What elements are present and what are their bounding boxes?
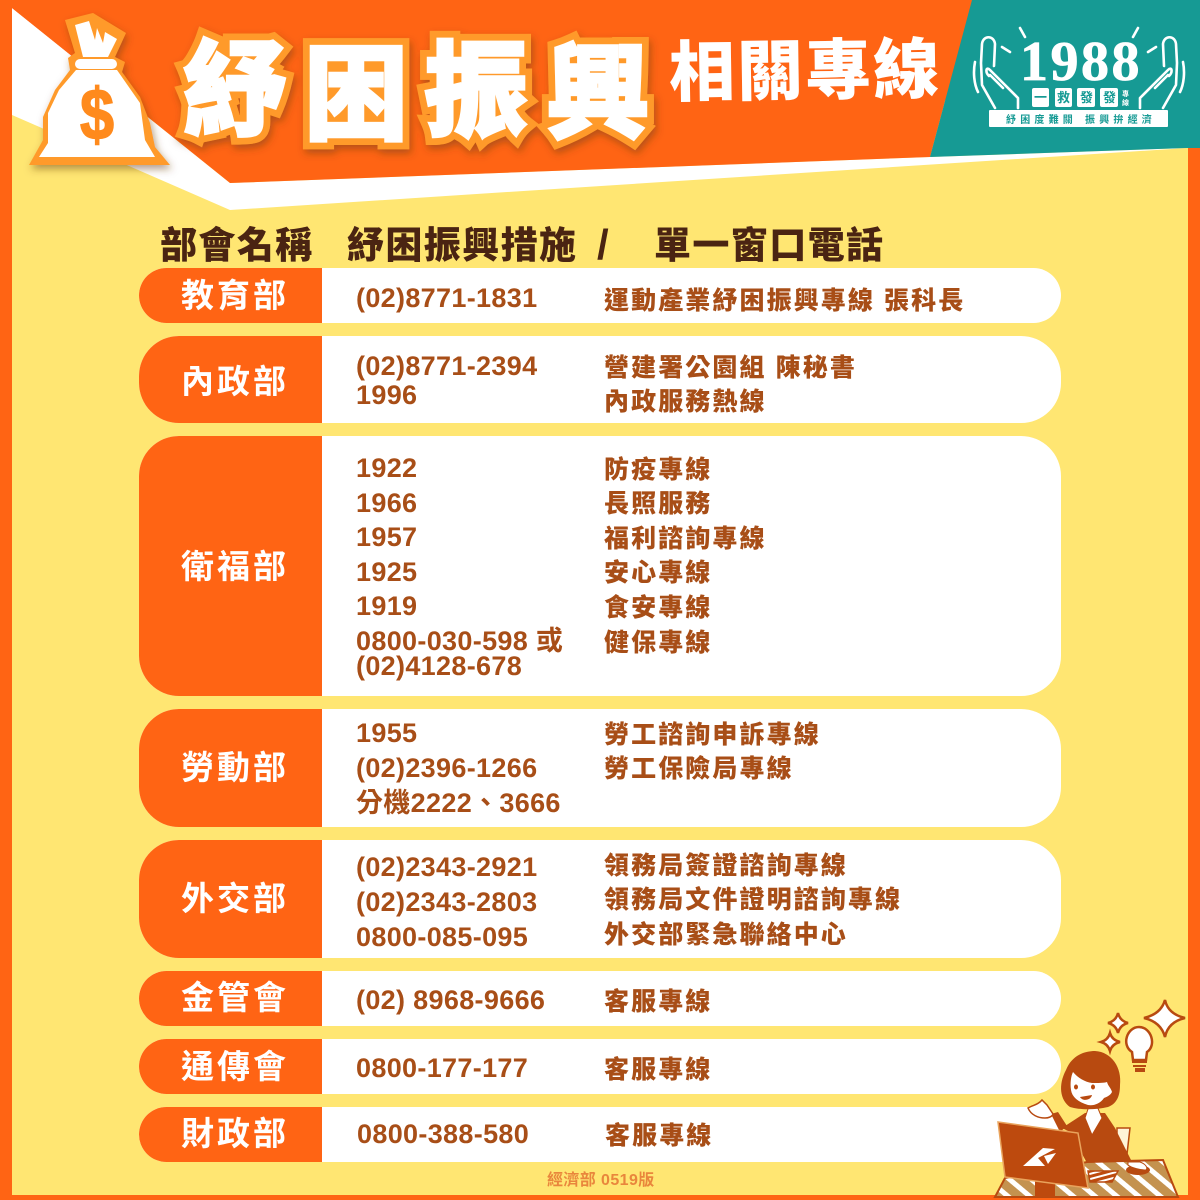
row: 外交部: 領務局簽證諮詢專線 [604, 851, 848, 880]
logo tiles: 發 [1080, 90, 1093, 105]
mouse with hand [1126, 1162, 1150, 1175]
row: 金管會: 客服專線 [604, 987, 712, 1016]
row: 衛福部: 1966 [356, 488, 417, 518]
row: 內政部: 內政部 [181, 363, 289, 400]
table header [160, 221, 884, 268]
title: 紓困振興: 興 [546, 37, 650, 153]
monitor stand [1035, 1177, 1055, 1197]
row: 外交部: (02)2343-2921 [356, 852, 537, 882]
row: 外交部: 外交部 [181, 880, 289, 917]
row: 外交部: 0800-085-095 [356, 922, 528, 952]
row: 勞動部: (02)2396-1266 [356, 753, 537, 783]
title: 紓困振興: 振 [424, 35, 528, 151]
table header: / [597, 221, 610, 268]
row: 衛福部: (02)4128-678 [356, 651, 522, 681]
keyboard [1088, 1171, 1118, 1182]
logo tiles [1032, 88, 1129, 107]
chair [1117, 1128, 1130, 1154]
row: 衛福部: 防疫專線 [604, 455, 712, 484]
raised hand [1028, 1100, 1053, 1118]
row: 勞動部: 勞工諮詢申訴專線 [604, 720, 821, 749]
row: 金管會 [139, 971, 1061, 1026]
row: 衛福部: 1925 [356, 557, 417, 587]
row: 衛福部: 1922 [356, 453, 417, 483]
logo tagline bar: 紓困度難關 [1006, 113, 1077, 126]
eyes and mouth [1074, 1084, 1095, 1100]
row: 教育部: 運動產業紓困振興專線 張科長 [604, 286, 965, 315]
row: 衛福部: 衛福部 [181, 548, 289, 585]
row: 勞動部 [139, 709, 1061, 827]
row: 勞動部: 分機2222、3666 [356, 788, 561, 818]
row: 衛福部: 長照服務 [604, 490, 712, 518]
row: 衛福部: 1919 [356, 591, 417, 621]
row: 外交部 [139, 840, 1061, 958]
row: 通傳會: 客服專線 [604, 1055, 712, 1084]
icon: money bag [29, 13, 170, 165]
row: 金管會: 金管會 [181, 979, 289, 1016]
jacket [1062, 1113, 1131, 1163]
monitor logo [1023, 1148, 1056, 1166]
logo right hand [1133, 28, 1184, 108]
illustration: office worker [995, 1000, 1185, 1197]
title: 紓困振興: 紓 [183, 34, 287, 150]
row: 金管會: (02) 8968-9666 [356, 985, 545, 1015]
logo tagline bar: 振興拚經濟 [1085, 113, 1156, 126]
subtitle: 相關專線: 相關專線 [669, 32, 942, 110]
row: 財政部 [139, 1107, 1061, 1162]
hair [1061, 1051, 1120, 1109]
row: 內政部: 內政服務熱線 [604, 388, 767, 416]
logo left hand [974, 28, 1025, 108]
table header: 單一窗口電話 [654, 225, 884, 266]
row: 教育部: (02)8771-1831 [356, 283, 537, 313]
row: 衛福部: 安心專線 [604, 558, 712, 587]
white diagonal band [12, 8, 1187, 210]
logo tiles: 一 [1034, 90, 1047, 105]
logo: 1988 [974, 28, 1184, 127]
row: 勞動部: 勞動部 [181, 749, 289, 786]
row: 衛福部: 食安專線 [604, 593, 712, 622]
row: 內政部: 營建署公園組 陳秘書 [604, 354, 857, 382]
logo tiles: 發 [1103, 90, 1116, 105]
shirt [1085, 1106, 1102, 1135]
row: 內政部: 1996 [356, 380, 417, 410]
icon: large sparkle [1144, 1000, 1185, 1037]
row: 外交部: 外交部緊急聯絡中心 [604, 920, 848, 949]
title: 紓困振興: 困 [304, 38, 408, 154]
table header: 紓困振興措施 [347, 225, 577, 266]
row: 通傳會: 0800-177-177 [356, 1053, 528, 1083]
row: 衛福部: 福利諮詢專線 [604, 524, 767, 553]
row: 教育部 [139, 268, 1061, 323]
logo tiles: 救 [1057, 90, 1070, 105]
row: 通傳會 [139, 1039, 1061, 1094]
row: 衛福部: 健保專線 [604, 629, 712, 657]
title: 紓困振興: 興 [546, 37, 650, 153]
row: 衛福部: 1957 [356, 522, 417, 552]
row: 財政部: 財政部 [181, 1115, 289, 1152]
logo number: 1988 [1020, 31, 1142, 93]
row: 通傳會: 通傳會 [181, 1048, 289, 1085]
face [1071, 1072, 1112, 1105]
row: 衛福部 [139, 436, 1061, 696]
row: 教育部: 教育部 [181, 277, 289, 314]
row: 勞動部: 1955 [356, 718, 417, 748]
row: 財政部: 客服專線 [605, 1121, 713, 1150]
monitor [998, 1122, 1088, 1188]
row: 外交部: (02)2343-2803 [356, 887, 537, 917]
footer note: 經濟部 0519版 [547, 1170, 655, 1189]
orange header banner [12, 0, 972, 183]
desk [995, 1160, 1178, 1197]
teal logo panel [930, 0, 1200, 157]
title: 紓困振興 [183, 34, 650, 154]
logo tiles: 專 [1122, 89, 1129, 98]
row: 財政部: 0800-388-580 [357, 1119, 529, 1149]
row: 衛福部: 0800-030-598 或 [356, 626, 563, 656]
icon: small sparkles [1101, 1013, 1128, 1051]
logo tagline bar [989, 110, 1168, 127]
table header: 部會名稱 [160, 225, 314, 266]
row: 外交部: 領務局文件證明諮詢專線 [604, 885, 902, 914]
row: 內政部: (02)8771-2394 [356, 351, 537, 381]
title: 紓困振興: 紓 [183, 34, 287, 150]
raised arm [1051, 1112, 1067, 1132]
title: 紓困振興: 困 [304, 38, 408, 154]
logo tiles: 線 [1122, 98, 1129, 107]
icon: money bag: $ [80, 75, 114, 155]
icon: light bulb [1126, 1027, 1152, 1072]
title: 紓困振興: 振 [424, 35, 528, 151]
row: 內政部 [139, 336, 1061, 423]
row: 勞動部: 勞工保險局專線 [604, 754, 794, 783]
